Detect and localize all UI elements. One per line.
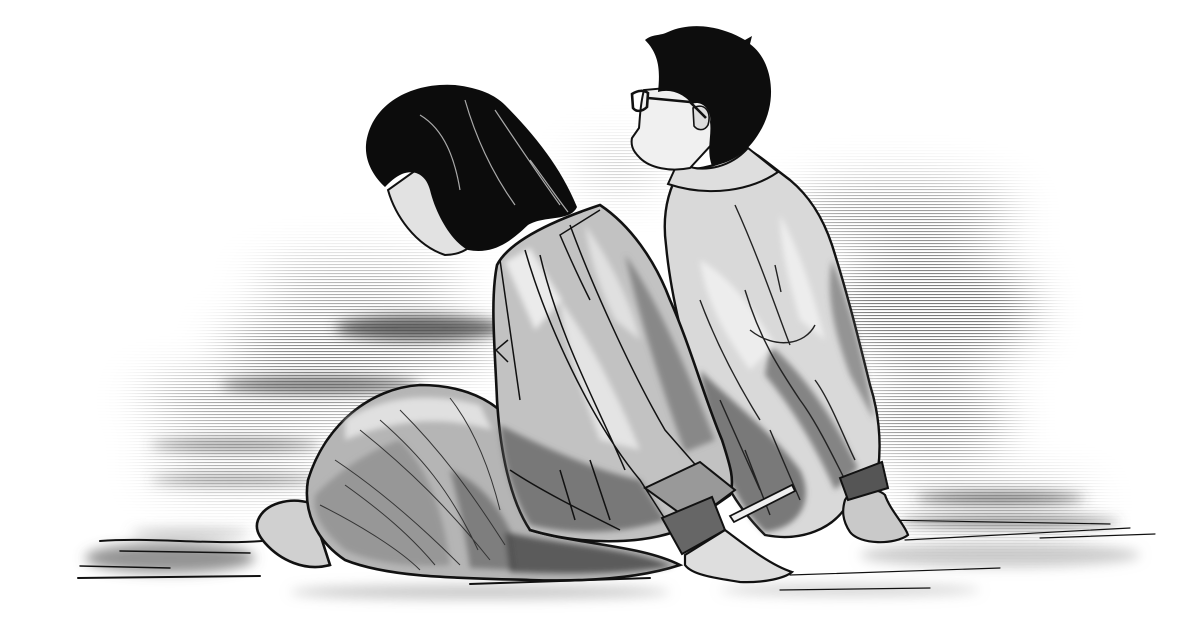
woman: sweater fold lines [496, 210, 700, 530]
woman: hair highlights [420, 100, 568, 212]
woman: hair [366, 85, 577, 251]
man: glasses [632, 91, 706, 118]
man [632, 26, 908, 542]
man: sweater shading [700, 215, 874, 532]
woman: skirt shading [314, 397, 672, 573]
woman: arm cuff [645, 462, 735, 522]
background hatching [80, 129, 1140, 605]
man: hair [645, 26, 771, 166]
man: torso and sweater [665, 148, 880, 537]
woman [257, 85, 792, 582]
man: bound hand [843, 490, 908, 542]
man: sweater fold lines [700, 205, 855, 515]
man: wrist rope [840, 462, 888, 500]
man: stick [730, 485, 795, 522]
woman: skirt fold lines [320, 398, 505, 570]
woman: sweater shading [500, 225, 715, 532]
woman: skirt [307, 385, 680, 580]
woman: face [388, 160, 483, 255]
man: collar [668, 148, 778, 191]
man: face [632, 85, 725, 170]
woman: foot [257, 501, 330, 567]
woman: hand [685, 530, 792, 582]
woman: torso and sweater [493, 205, 732, 541]
ground line strokes [78, 520, 1155, 590]
woman: wrist rope [662, 497, 725, 554]
man: ear [693, 106, 709, 130]
